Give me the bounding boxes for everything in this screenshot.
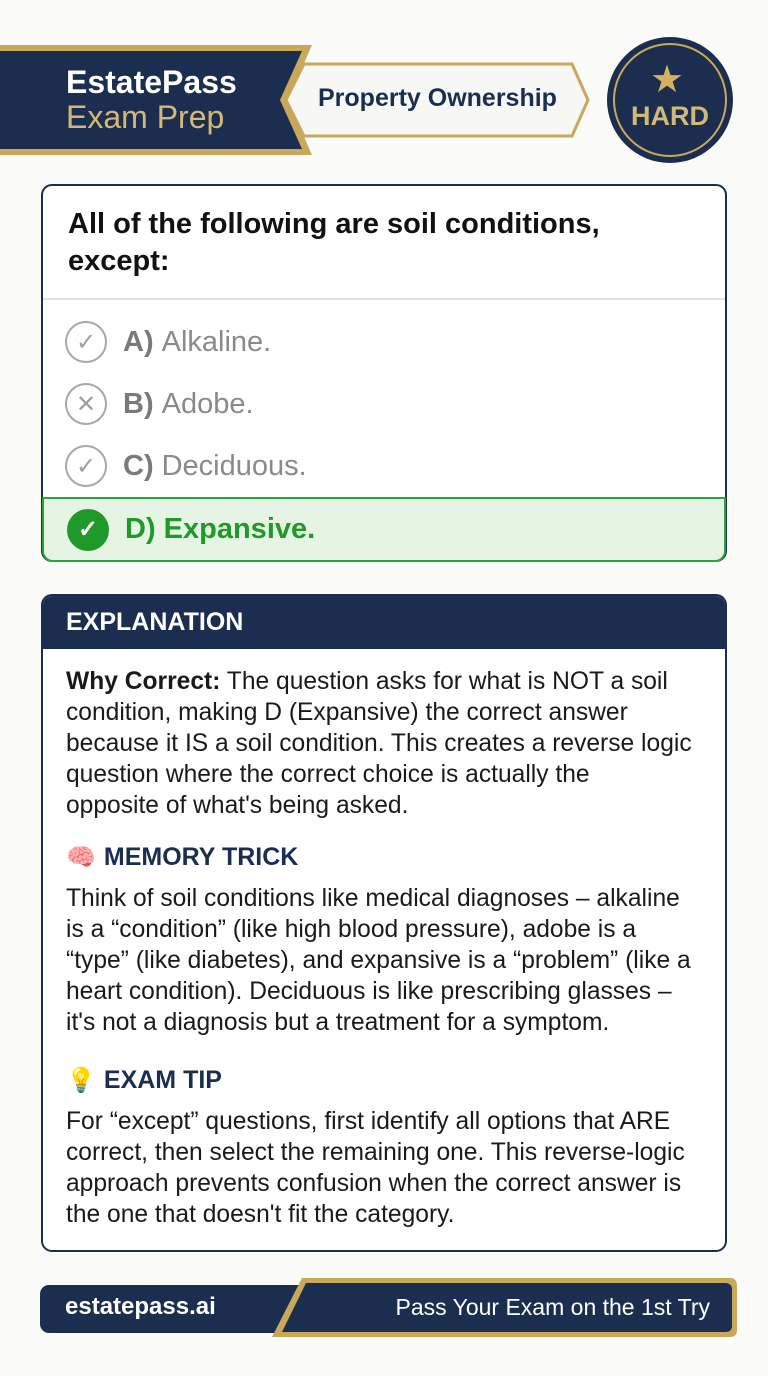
icon: star: ★ — [650, 59, 684, 101]
exam tip text: correct, then select the remaining one. This reverse-logic — [66, 1139, 685, 1166]
why correct text: Why Correct: The question asks for what is NOT a soil — [66, 668, 668, 695]
option A: A) — [123, 326, 154, 358]
why correct text: opposite of what's being asked. — [66, 792, 408, 819]
difficulty badge: HARD — [631, 101, 709, 131]
option B: B) — [123, 388, 154, 420]
option B — [65, 383, 254, 425]
footer: Pass Your Exam on the 1st Try — [396, 1294, 710, 1320]
difficulty badge — [607, 37, 733, 163]
question text: All of the following are soil conditions, except: — [68, 208, 600, 277]
option C: Deciduous. — [162, 450, 307, 482]
header banner: brand: EstatePass — [66, 64, 237, 100]
memory trick text: it's not a diagnosis but a treatment for a symptom. — [66, 1009, 609, 1036]
option A: ✓ — [76, 328, 96, 356]
exam tip text — [66, 1108, 685, 1228]
why correct text: because it IS a soil condition. This creates a reverse logic — [66, 730, 692, 757]
explanation header — [43, 596, 729, 649]
memory trick heading: MEMORY TRICK — [104, 843, 298, 871]
memory trick text: Think of soil conditions like medical diagnoses – alkaline — [66, 885, 680, 912]
option B: ✕ — [76, 390, 96, 418]
memory trick text: heart condition). Deciduous is like prescribing glasses – — [66, 978, 672, 1005]
footer — [40, 1278, 737, 1337]
why correct text: condition, making D (Expansive) the correct answer — [66, 699, 628, 726]
option A: Alkaline. — [162, 326, 271, 358]
topic pill — [288, 62, 590, 138]
memory trick text: is a “condition” (like high blood pressure), adobe is a — [66, 916, 636, 943]
exam tip text: approach prevents confusion when the correct answer is — [66, 1170, 681, 1197]
topic pill: Property Ownership — [318, 84, 557, 112]
option C: ✓ — [76, 452, 96, 480]
exam tip heading: 💡 — [66, 1067, 96, 1094]
option D correct: ✓ — [78, 516, 98, 543]
explanation header: EXPLANATION — [66, 608, 243, 636]
option B: Adobe. — [162, 388, 254, 420]
exam tip text: the one that doesn't fit the category. — [66, 1201, 454, 1228]
header banner: brand — [0, 45, 312, 155]
explanation panel — [41, 594, 727, 1252]
memory trick text: “type” (like diabetes), and expansive is a “problem” (like a — [66, 947, 691, 974]
exam tip heading: EXAM TIP — [104, 1066, 222, 1094]
why correct text: question where the correct choice is actually the — [66, 761, 590, 788]
footer: estatepass.ai — [65, 1293, 216, 1320]
option D correct: D) Expansive. — [125, 513, 315, 545]
memory trick text — [66, 885, 691, 1036]
header banner: brand: Exam Prep — [66, 99, 224, 135]
why correct text — [66, 668, 692, 819]
question card — [41, 184, 727, 562]
exam tip text: For “except” questions, first identify all options that ARE — [66, 1108, 670, 1135]
option D correct — [42, 497, 726, 562]
option A — [65, 321, 271, 363]
memory trick heading: 🧠 — [66, 844, 96, 871]
option C: C) — [123, 450, 154, 482]
option C — [65, 445, 307, 487]
